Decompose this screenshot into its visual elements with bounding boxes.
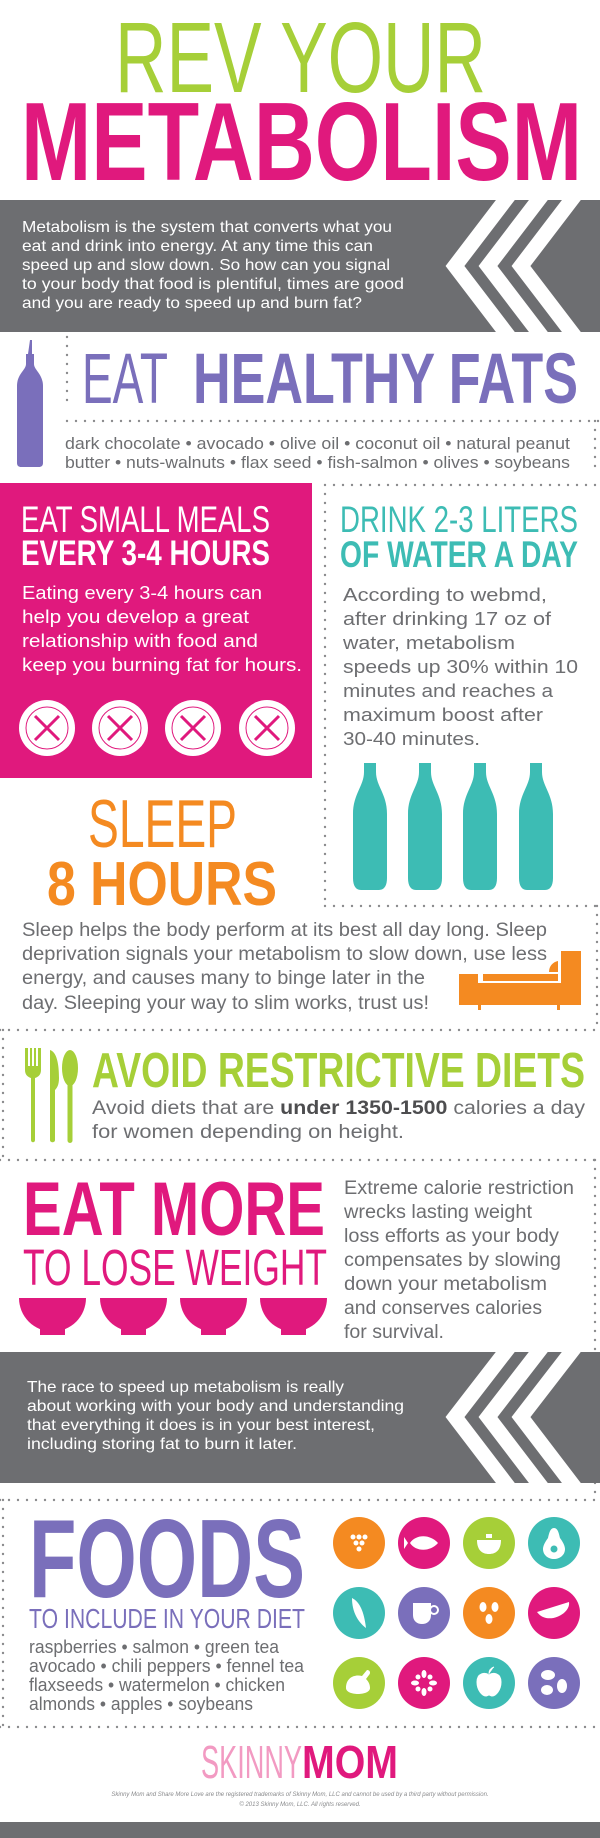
panel: sleep: day. Sleeping your way to slim works, trust us!: [22, 993, 429, 1014]
panel: eat small meals: EVERY 3-4 HOURS: [21, 534, 270, 573]
panel: eat small meals: keep you burning fat for hours.: [22, 655, 302, 675]
panel: sleep: deprivation signals your metabolism to slow down, use less: [22, 944, 547, 965]
panel: eat more: compensates by slowing: [344, 1250, 561, 1271]
panel: eat more: loss efforts as your body: [344, 1226, 560, 1247]
panel: avoid restrictive diets: Avoid diets that are under 1350-1500 calories a day: [92, 1098, 586, 1119]
panel: eat small meals: EAT SMALL MEALS: [21, 499, 270, 540]
panel: drink water: minutes and reaches a: [343, 681, 554, 701]
panel: eat more: Extreme calorie restriction: [344, 1178, 574, 1199]
panel: sleep: energy, and causes many to binge later in the: [22, 968, 425, 989]
logo: skinnymom: MOM: [302, 1736, 398, 1788]
heading: eat healthy fats: EAT: [82, 340, 168, 419]
panel: avoid restrictive diets: [25, 1044, 586, 1143]
panel: drink water: water, metabolism: [342, 633, 515, 653]
panel: eat more: for survival.: [344, 1322, 444, 1343]
logo: skinnymom: SKINNY: [201, 1736, 302, 1788]
panel: eat more: and conserves calories: [344, 1298, 542, 1319]
chevrons: [455, 190, 579, 342]
panel: intro gray band: [0, 200, 600, 332]
panel: foods: avocado • chili peppers • fennel tea: [29, 1656, 305, 1676]
panel: drink water: speeds up 30% within 10: [343, 657, 578, 677]
panel: foods: [29, 1497, 580, 1714]
intro text: speed up and slow down. So how can you signal: [22, 257, 390, 274]
panel: sleep: [22, 786, 581, 1014]
footnote: © 2013 Skinny Mom, LLC. All rights reserved.: [239, 1801, 361, 1808]
panel: eat more: TO LOSE WEIGHT: [23, 1239, 327, 1296]
panel: closing gray band: including storing fat to burn it later.: [27, 1436, 297, 1453]
footnote: [111, 1792, 489, 1808]
panel: closing gray band: about working with your body and understanding: [27, 1398, 404, 1415]
panel: foods: raspberries • salmon • green tea: [29, 1637, 280, 1657]
icon: cutlery: [25, 1048, 78, 1143]
text: healthy fats list: [65, 434, 570, 472]
panel: avoid restrictive diets: for women depending on height.: [92, 1122, 404, 1143]
panel: sleep: Sleep helps the body perform at its best all day long. Sleep: [22, 920, 547, 941]
panel: sleep: SLEEP: [88, 786, 237, 862]
panel: foods: TO INCLUDE IN YOUR DIET: [29, 1603, 305, 1634]
panel: foods: flaxseeds • watermelon • chicken: [29, 1675, 285, 1695]
panel: eat more: [19, 1167, 574, 1343]
text: healthy fats list: butter • nuts-walnuts • flax seed • fish-salmon • olives • soybeans: [65, 453, 570, 472]
panel: drink water: 30-40 minutes.: [343, 729, 480, 749]
intro text: [22, 219, 404, 312]
panel: eat small meals: help you develop a great: [22, 607, 249, 627]
panel: closing gray band: The race to speed up metabolism is really: [27, 1379, 344, 1396]
panel: eat more: wrecks lasting weight: [343, 1202, 533, 1223]
panel: eat more: down your metabolism: [344, 1274, 547, 1295]
panel: eat small meals: [0, 483, 312, 778]
panel: eat more: EAT MORE: [23, 1167, 325, 1252]
icons: bottles: [353, 763, 553, 890]
icons: bowls: [19, 1298, 327, 1335]
panel: foods: almonds • apples • soybeans: [29, 1694, 253, 1714]
footer band: [0, 1822, 600, 1838]
intro text: and you are ready to speed up and burn fat?: [22, 295, 362, 312]
panel: sleep: 8 HOURS: [47, 850, 277, 919]
icons: food circles: [333, 1517, 580, 1709]
panel: eat small meals: Eating every 3-4 hours can: [22, 583, 262, 603]
panel: drink water: [340, 499, 578, 890]
panel: drink water: after drinking 17 oz of: [343, 609, 552, 629]
panel: eat small meals: relationship with food and: [22, 631, 258, 651]
intro text: to your body that food is plentiful, times are good: [22, 276, 404, 293]
panel: drink water: maximum boost after: [343, 705, 543, 725]
icon: sofa: [459, 951, 581, 1010]
panel: drink water: According to webmd,: [343, 585, 547, 605]
panel: closing gray band: [0, 1352, 600, 1483]
intro text: Metabolism is the system that converts what you: [22, 219, 392, 236]
icons: plates: [19, 700, 295, 756]
panel: foods: FOODS: [29, 1497, 305, 1621]
panel: closing gray band: that everything it does is in your best interest,: [27, 1417, 375, 1434]
icon: oil bottle: [17, 340, 43, 467]
footnote: Skinny Mom and Share More Love are the registered trademarks of Skinny Mom, LLC and cannot be used by a third party without permission.: [111, 1792, 489, 1798]
text: healthy fats list: dark chocolate • avocado • olive oil • coconut oil • natural peanut: [65, 434, 570, 453]
intro text: eat and drink into energy. At any time this can: [22, 238, 373, 255]
